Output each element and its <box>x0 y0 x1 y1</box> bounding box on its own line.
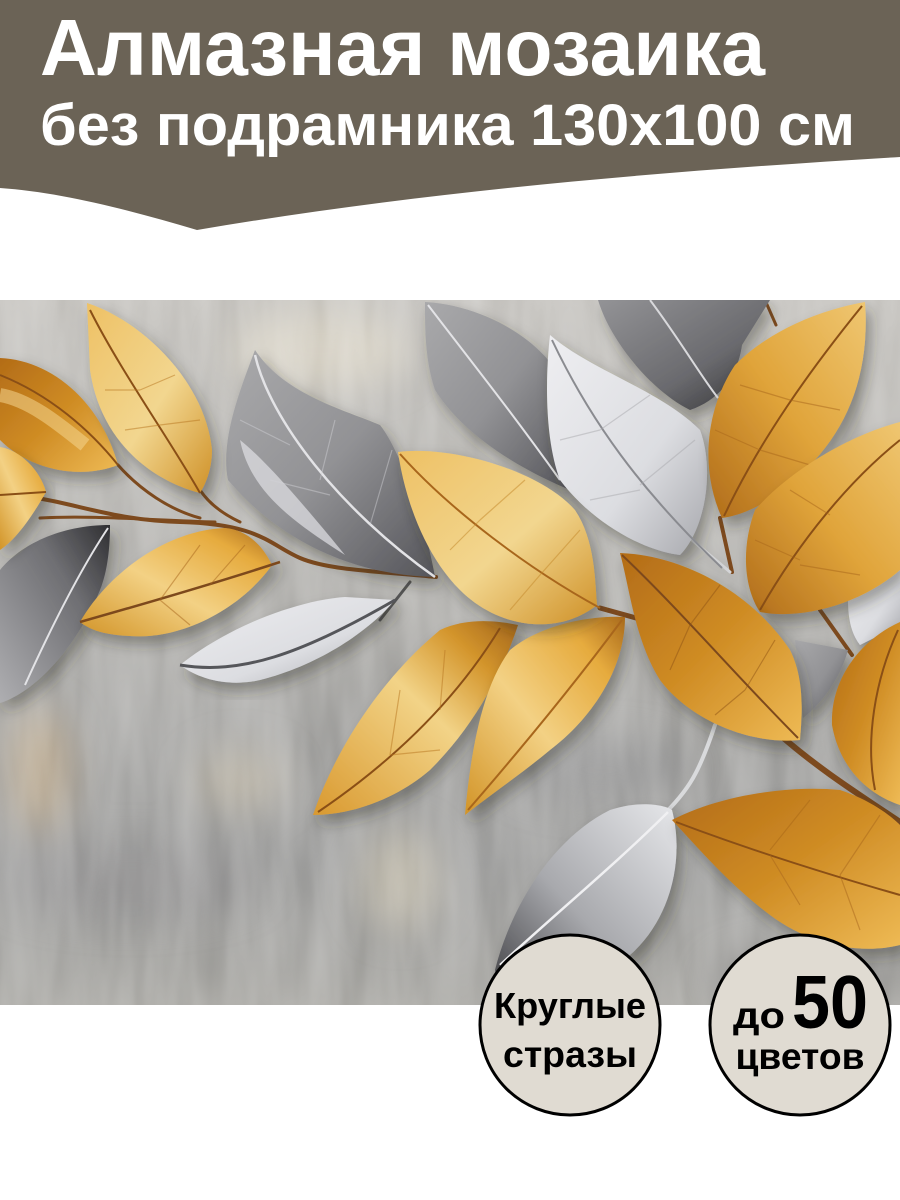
badge: round rhinestones: Круглые <box>494 985 646 1026</box>
leaf: gold right <box>746 422 900 614</box>
picture: leaves on grey canvas <box>0 300 900 1010</box>
leaf: gold centre right <box>620 553 802 741</box>
badge: round rhinestones: стразы <box>503 1034 637 1075</box>
leaf: dark silver left <box>0 525 110 703</box>
leaf: gold bottom right <box>672 789 900 949</box>
badge: up to 50 colours: 50 <box>792 960 868 1044</box>
leaf: dark silver centre <box>226 350 435 577</box>
leaf: white silver <box>547 335 722 568</box>
title: Алмазная мозаика <box>40 3 765 92</box>
stems <box>0 300 900 822</box>
leaf: gold bottom pair right <box>465 617 625 815</box>
leaf: silver bottom <box>495 804 677 1000</box>
leaf: gold top right <box>708 302 866 518</box>
silver stems <box>380 530 730 818</box>
leaf: gold left edge <box>0 447 46 550</box>
header banner <box>0 0 900 230</box>
canvas background <box>0 300 900 1010</box>
leaf: slim silver <box>180 597 395 683</box>
leaf: gold bottom pair left <box>313 621 518 815</box>
leaf: gold lower left <box>80 528 280 636</box>
leaves: right silver fragments <box>795 565 900 718</box>
leaf: gold far left <box>0 358 118 472</box>
leaf: gold right edge <box>832 622 900 805</box>
badge: up to 50 colours: цветов <box>736 1036 864 1077</box>
badge: round rhinestones <box>480 935 660 1115</box>
leaf: gold large centre <box>398 451 600 624</box>
leaf: gold upper left <box>87 303 212 493</box>
leaf: grey silver top <box>425 302 570 490</box>
subtitle: без подрамника 130х100 см <box>40 93 855 158</box>
leaf: dark silver top <box>598 300 770 410</box>
badge: up to 50 colours: до <box>733 995 785 1036</box>
badge: up to 50 colours <box>710 935 890 1115</box>
